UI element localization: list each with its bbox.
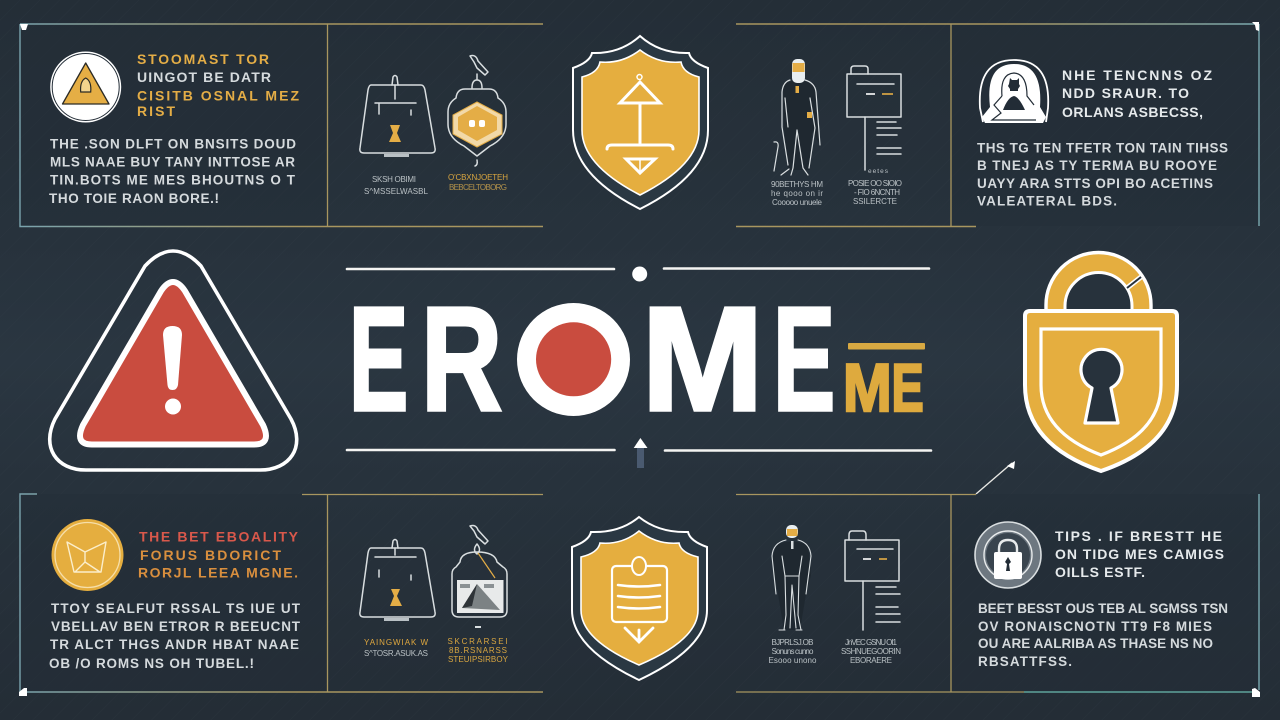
icon captions: Sonuns cunno (772, 647, 814, 656)
panel: bottom left (19, 494, 543, 696)
icon captions: eetes (868, 168, 889, 175)
title: EROME ME: M (642, 277, 764, 442)
title rules (347, 266, 931, 468)
icon captions (364, 637, 509, 664)
icon captions: S^TOSR.ASUK.AS (364, 649, 428, 658)
icon captions: Cooooo unuele (772, 198, 823, 207)
panel body text: THE .SON DLFT ON BNSITS DOUD (50, 136, 296, 152)
panel heading: UINGOT BE DATR (137, 69, 271, 85)
icon captions (771, 168, 902, 207)
icon captions: O'CBXNJOETEH (448, 173, 508, 182)
panel body text: THS TG TEN TFETR TON TAIN TIHSS (977, 140, 1228, 156)
panel body text (977, 140, 1228, 208)
panel heading: RORJL LEEA MGNE. (138, 564, 298, 580)
panel body text: MLS NAAE BUY TANY INTTOSE AR (50, 154, 295, 170)
icon captions: STEUIPSIRBOY (448, 655, 509, 664)
icon: warning badge (50, 52, 121, 122)
icon captions: POSIE OO SIOIO (848, 179, 902, 188)
panel body text (49, 136, 296, 206)
panel: bottom right icons (768, 525, 901, 665)
panel heading: TIPS . IF BRESTT HE (1055, 528, 1222, 544)
icon: bottom shield (572, 517, 707, 680)
icon captions (364, 173, 508, 196)
panel body text (49, 601, 301, 671)
icon captions: BJPRLSJ.OB (772, 638, 814, 647)
panel: top left (20, 24, 543, 226)
icon captions: Esooo unono (768, 656, 817, 665)
icon: tag badge (448, 56, 506, 166)
icon: person (774, 59, 820, 175)
icon captions: 8B.RSNARSS (449, 646, 507, 655)
icon captions (768, 638, 901, 665)
title: EROME ME (349, 276, 925, 442)
icon: lock badge (975, 522, 1041, 588)
icon captions: he qooo on ir (771, 189, 823, 198)
panel: top left icons (360, 56, 508, 196)
icon: hooded figure (980, 60, 1048, 123)
icon captions: YAINGWIAK W (364, 638, 428, 647)
panel heading: THE BET EBOALITY (139, 528, 299, 544)
icon captions: JnVEC GSNU OI1 (845, 638, 898, 647)
title: EROME ME: E (349, 277, 408, 442)
panel body text: UAYY ARA STTS OPI BO ACETINS (977, 176, 1213, 191)
icon: gold emblem (52, 519, 124, 591)
panel heading (137, 51, 299, 119)
icon: bag (360, 540, 435, 621)
icon captions: EBORAERE (850, 656, 892, 665)
panel body text: B TNEJ AS TY TERMA BU ROOYE (977, 158, 1217, 173)
title: EROME ME: E (892, 351, 924, 426)
icon captions: - FIO 6NCNTH (854, 188, 900, 197)
title: EROME ME: M (843, 351, 892, 426)
title: EROME ME: O (520, 277, 624, 442)
panel body text: VBELLAV BEN ETROR R BEEUCNT (51, 619, 301, 634)
icon captions: SSILERCTE (853, 197, 897, 206)
panel body text: TIN.BOTS ME MES BHOUTNS O T (50, 172, 296, 188)
icon: signboard (847, 66, 901, 170)
panel body text: OV RONAISCNOTN TT9 F8 MIES (978, 619, 1212, 634)
title: EROME ME: R (421, 276, 502, 442)
icon: padlock tag with picture (452, 526, 507, 628)
panel heading: FORUS BDORICT (140, 547, 281, 563)
panel body text: TR ALCT THGS ANDR HBAT NAAE (50, 637, 299, 652)
panel heading (1062, 67, 1212, 120)
panel body text: OU ARE AALRIBA AS THASE NS NO (978, 636, 1213, 651)
icon: large padlock (1025, 253, 1177, 471)
icon captions: SKSH OBIMI (372, 175, 416, 184)
icon: large warning triangle (50, 251, 297, 470)
panel heading: ORLANS ASBECSS, (1062, 104, 1203, 120)
icon: signboard (845, 531, 900, 630)
panel heading (1055, 528, 1224, 580)
panel: bottom right (736, 494, 1260, 697)
panel heading: NDD SRAUR. TO (1062, 85, 1189, 101)
icon captions: 90BETHYS HM (771, 180, 823, 189)
panel heading: NHE TENCNNS OZ (1062, 67, 1212, 83)
panel heading: RIST (137, 103, 175, 119)
panel body text (978, 601, 1228, 669)
panel heading: STOOMAST TOR (137, 51, 269, 67)
panel body text: TTOY SEALFUT RSSAL TS IUE UT (51, 601, 301, 616)
arrow: connector to padlock (976, 461, 1015, 494)
panel body text: BEET BESST OUS TEB AL SGMSS TSN (978, 601, 1228, 616)
panel: top right (736, 22, 1259, 226)
icon captions: SKCRARSEI (448, 637, 508, 646)
icon captions: SSHNUEGOORIN (841, 647, 901, 656)
panel body text: THO TOIE RAON BORE.! (49, 191, 219, 206)
title: EROME ME: E (773, 277, 835, 442)
panel: bottom left icons (360, 526, 509, 664)
panel heading: CISITB OSNAL MEZ (137, 88, 299, 104)
panel body text: VALEATERAL BDS. (977, 194, 1117, 208)
icon captions: S^MSSELWASBL (364, 187, 429, 196)
panel heading: OILLS ESTF. (1055, 564, 1145, 580)
icon: bag (360, 76, 435, 157)
icon captions: BEBCELTOBORG (449, 183, 507, 192)
panel body text: OB /O ROMS NS OH TUBEL.! (49, 656, 254, 671)
panel heading (138, 528, 299, 580)
panel body text: RBSATTFSS. (978, 654, 1072, 669)
panel: top right icons (771, 59, 902, 207)
icon: person (772, 525, 811, 630)
panel heading: ON TIDG MES CAMIGS (1055, 546, 1224, 562)
icon: top shield (573, 36, 708, 209)
